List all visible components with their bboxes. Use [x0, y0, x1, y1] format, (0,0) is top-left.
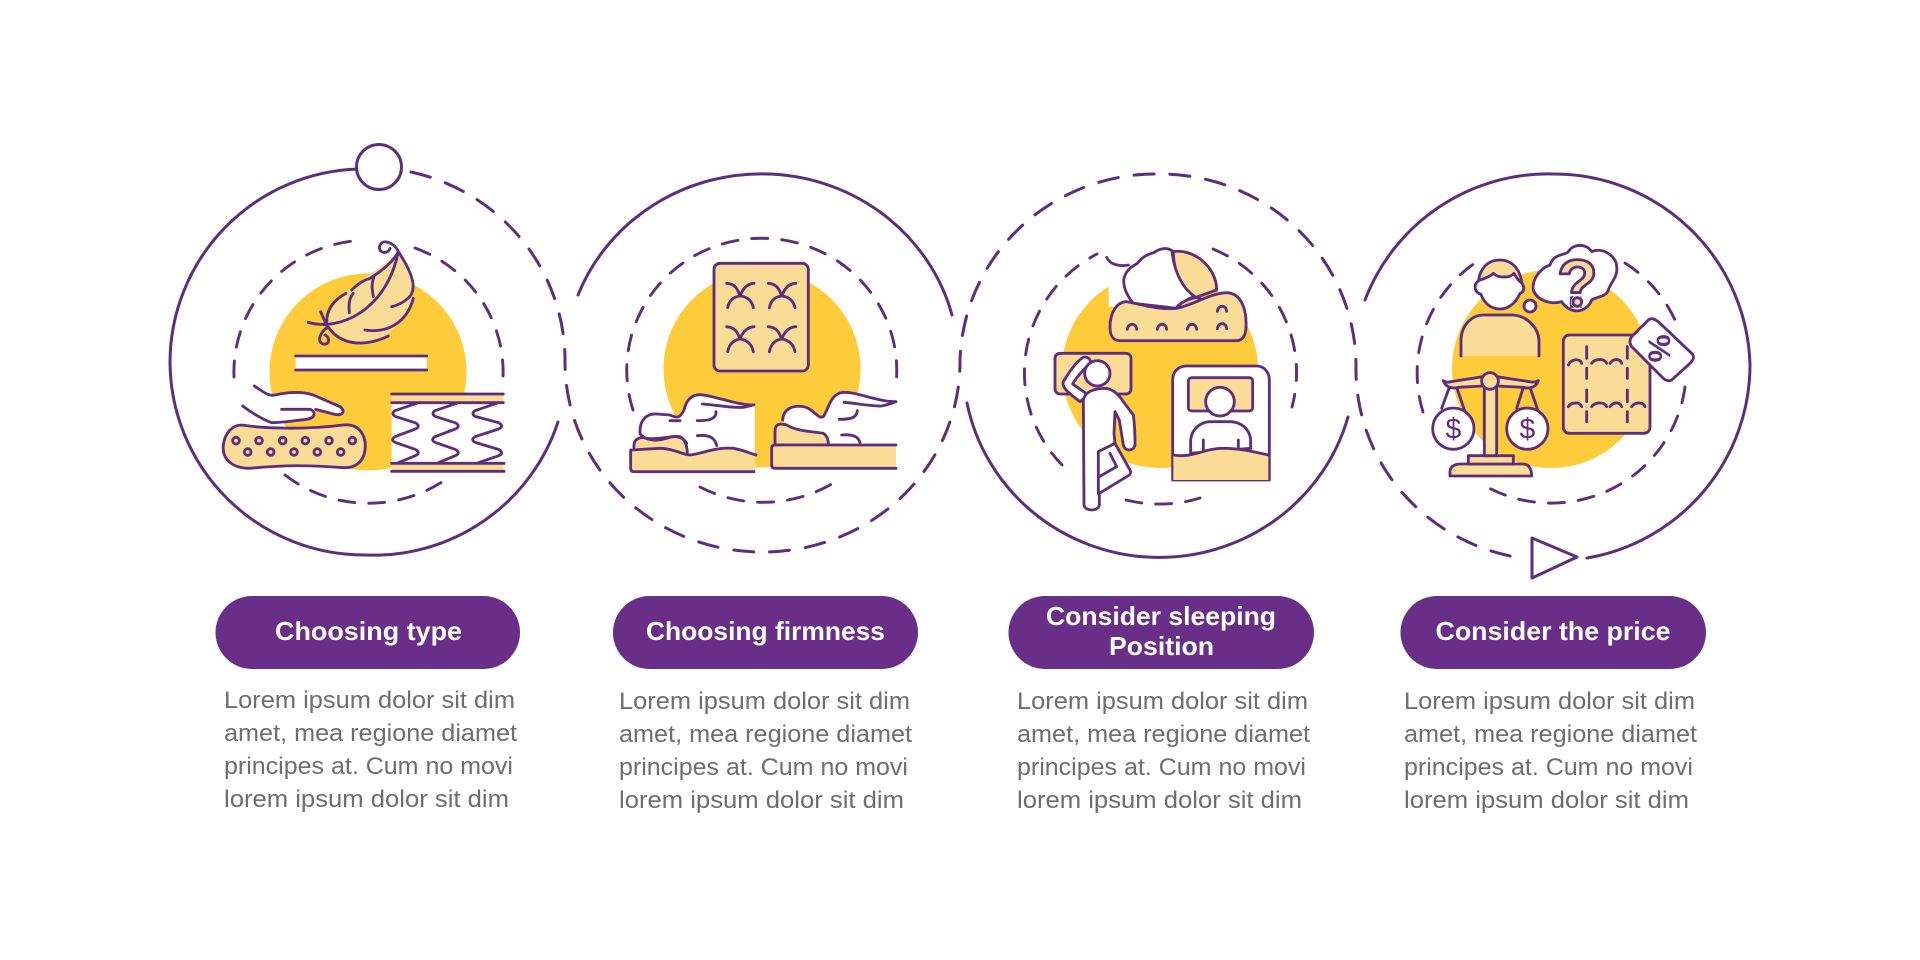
step heading pill: [216, 596, 520, 669]
body text: amet, mea regione diamet: [224, 720, 517, 747]
body text: lorem ipsum dolor sit dim: [1404, 787, 1689, 814]
body text: Lorem ipsum dolor sit dim: [224, 687, 515, 714]
panel: choosing type: [170, 144, 558, 813]
step heading pill: Choosing type: [275, 616, 462, 646]
start node circle: [356, 144, 402, 190]
inner dashed ring: [234, 241, 503, 503]
step heading pill: [1008, 596, 1314, 669]
body text: principes at. Cum no movi: [1017, 754, 1306, 781]
icon: firm and soft mattress with sleepers: [629, 263, 896, 472]
body text: [1017, 688, 1310, 814]
yellow backdrop circle: [1062, 272, 1258, 468]
ring: solid lower arc: [967, 403, 1348, 557]
icon: three sleeping positions: [1055, 247, 1269, 510]
panel: consider sleeping position: [967, 247, 1348, 814]
connector: dashed wave linking the four steps: [411, 172, 1510, 556]
panel: choosing firmness: [578, 174, 952, 814]
body text: lorem ipsum dolor sit dim: [224, 786, 509, 813]
body text: principes at. Cum no movi: [619, 754, 908, 781]
body text: [1404, 688, 1697, 814]
body text: Lorem ipsum dolor sit dim: [1017, 688, 1308, 715]
icon: person weighing price of mattress: %: [1642, 334, 1678, 362]
yellow backdrop circle: [270, 274, 466, 470]
step heading pill: Position: [1109, 631, 1214, 661]
body text: Lorem ipsum dolor sit dim: [1404, 688, 1695, 715]
icon: feather, foam and spring mattress: [223, 242, 504, 471]
body text: amet, mea regione diamet: [1404, 721, 1697, 748]
body text: amet, mea regione diamet: [619, 721, 912, 748]
step heading pill: Consider the price: [1436, 616, 1670, 646]
step heading pill: Consider sleeping: [1046, 601, 1276, 631]
icon: person weighing price of mattress: $: [1445, 414, 1461, 446]
body text: amet, mea regione diamet: [1017, 721, 1310, 748]
body text: lorem ipsum dolor sit dim: [1017, 787, 1302, 814]
body text: Lorem ipsum dolor sit dim: [619, 688, 910, 715]
body text: [619, 688, 912, 814]
body text: lorem ipsum dolor sit dim: [619, 787, 904, 814]
inner dashed ring: [1024, 249, 1297, 504]
ring: solid outer arc: [170, 169, 558, 555]
ring: solid upper arc: [578, 174, 952, 315]
icon: person weighing price of mattress: ?: [1557, 248, 1598, 322]
step heading pill: Choosing firmness: [646, 616, 885, 646]
icon: person weighing price of mattress: [1433, 245, 1693, 476]
end arrow triangle: [1532, 538, 1577, 578]
icon: person weighing price of mattress: $: [1519, 414, 1535, 446]
body text: principes at. Cum no movi: [224, 753, 513, 780]
yellow backdrop circle: [1452, 270, 1650, 468]
yellow backdrop circle: [664, 270, 860, 468]
inner dashed ring: [1417, 263, 1685, 503]
step heading pill: [613, 596, 918, 669]
step heading pill: [1400, 596, 1706, 669]
panel: consider the price: [1365, 174, 1750, 814]
ring: solid outer arc: [1365, 174, 1750, 558]
body text: [224, 687, 517, 813]
body text: principes at. Cum no movi: [1404, 754, 1693, 781]
inner dashed ring: [627, 238, 897, 502]
